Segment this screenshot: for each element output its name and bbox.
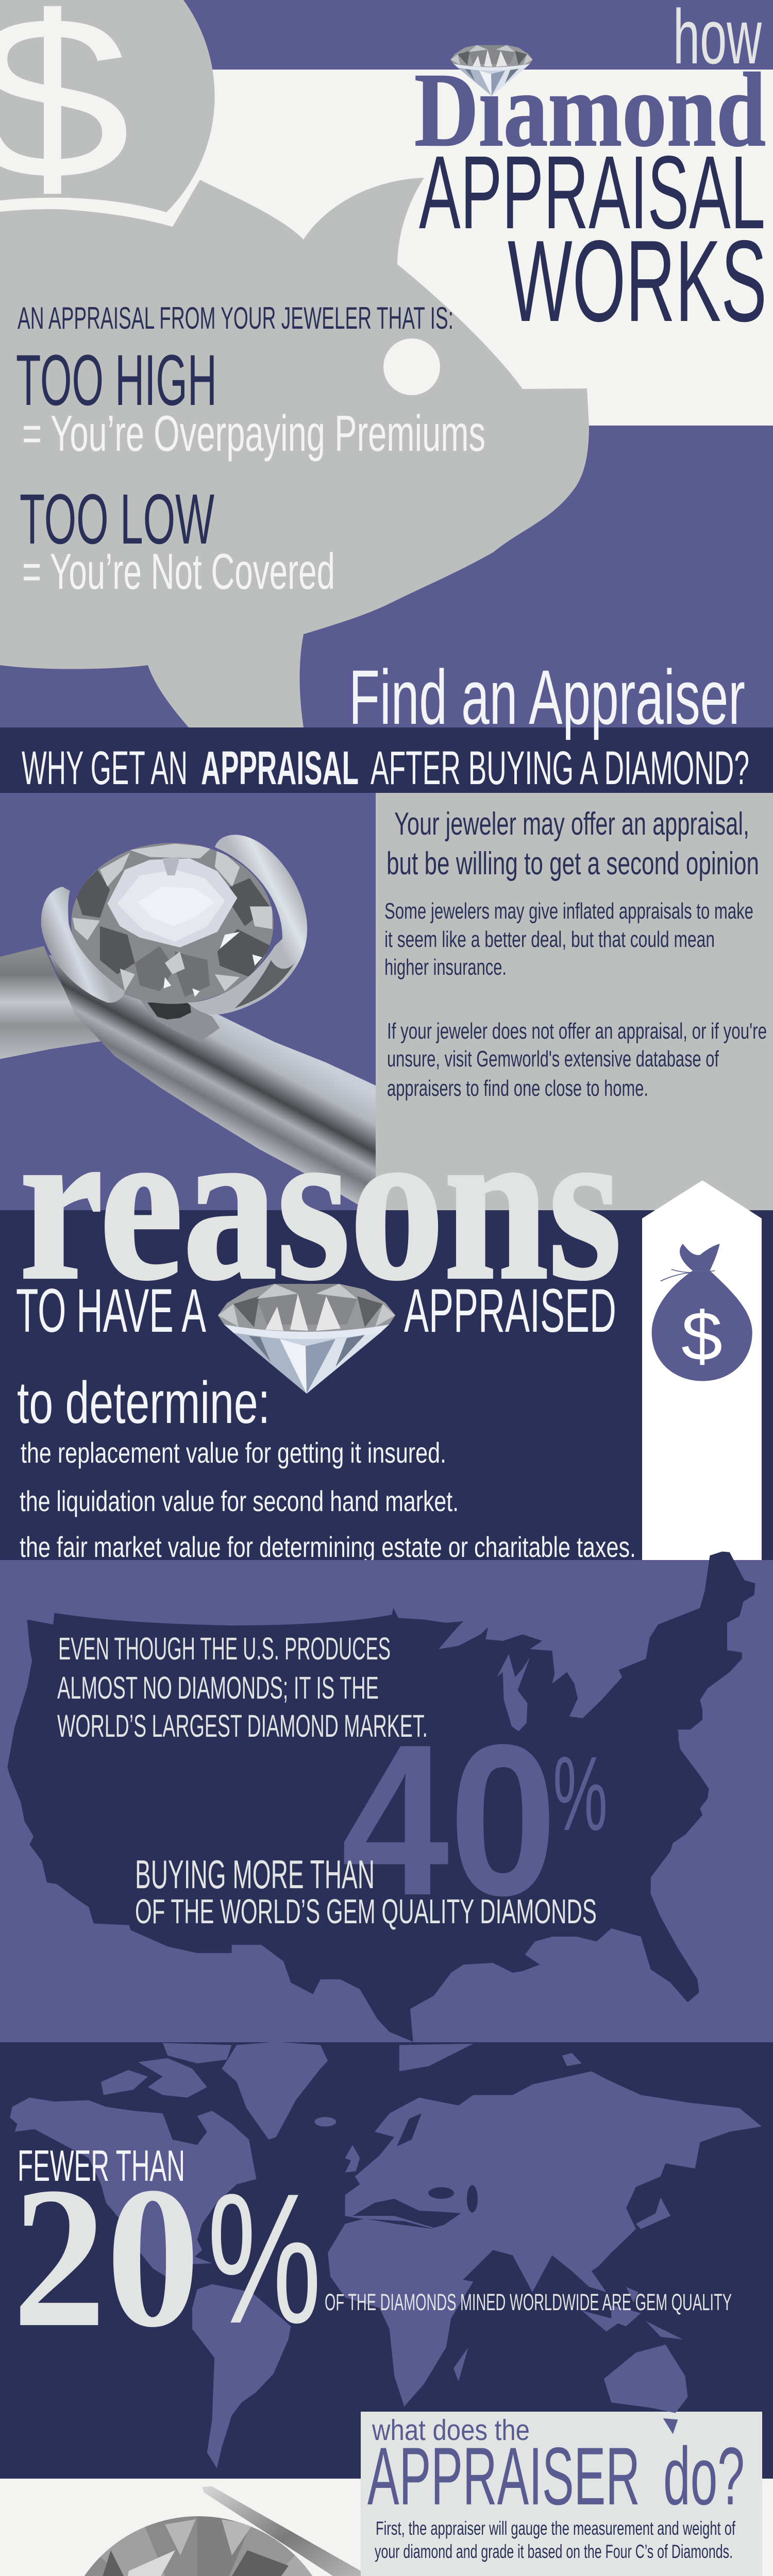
too low heading: TOO LOW (20, 480, 214, 559)
heading: what does the appraiser do: what does the (372, 2414, 530, 2447)
prong right (188, 835, 307, 1014)
stat: 40 percent: % (553, 1735, 608, 1853)
intro line: AN APPRAISAL FROM YOUR JEWELER THAT IS: (18, 301, 453, 335)
paragraph: gemworld database: appraisers to find one close to home. (387, 1076, 648, 1101)
ring panel background (0, 793, 376, 1211)
subheading (386, 806, 759, 882)
too high heading: TOO HIGH (16, 340, 217, 420)
prong shading (235, 960, 296, 1008)
right grey text panel (376, 793, 773, 1211)
top purple band (0, 0, 773, 70)
reason 2: the liquidation value for second hand market. (20, 1485, 459, 1517)
tweezers top tip (202, 2486, 361, 2576)
stat: 20 percent: 20 (12, 2145, 200, 2369)
stat: 20 percent (12, 2145, 322, 2369)
white arrow (642, 1180, 762, 1560)
subheading: to determine: to determine: (17, 1370, 270, 1436)
prong left (41, 887, 125, 1003)
paragraph: gemworld database (387, 1019, 767, 1101)
purple section behind find an appraiser (0, 426, 773, 727)
world section background (0, 2042, 773, 2479)
heading: reasons: reasons (20, 1082, 621, 1325)
heading: to have a diamond appraised: TO HAVE A (16, 1276, 206, 1345)
dark reasons section (0, 1210, 773, 1560)
ring band left (0, 946, 105, 1059)
icon: money bag (652, 1244, 752, 1381)
icon: piggy bank with coin (0, 0, 589, 727)
map: United States (7, 1551, 755, 2042)
heading: why get an appraisal: APPRAISAL (201, 742, 359, 794)
pig eye (383, 338, 440, 395)
coin (0, 0, 215, 212)
heading: why get an appraisal (22, 742, 749, 794)
icon: diamond (218, 1284, 395, 1394)
list: reasons to determine (17, 1370, 636, 1563)
image: diamond ring (0, 835, 380, 1217)
icon: small diamond above title (450, 45, 533, 96)
stat: 40 percent: 40 (341, 1700, 557, 1940)
paragraph: inflated appraisals (384, 899, 753, 980)
text block: largest diamond market (57, 1631, 428, 1743)
text: fewer than: FEWER THAN (18, 2142, 185, 2191)
heading: to have a diamond appraised (16, 1276, 616, 1345)
too high result: = You’re Overpaying Premiums (22, 405, 485, 462)
map: world (10, 2042, 762, 2468)
text block: largest diamond market: EVEN THOUGH THE U.S. PRODUCES (58, 1631, 391, 1666)
setting post (140, 999, 220, 1042)
ring band right (49, 955, 380, 1217)
dark heading band (0, 727, 773, 793)
heading: to have a diamond appraised: APPRAISED (404, 1276, 616, 1345)
icon: money bag: $ (681, 1297, 722, 1375)
image: loose diamond (85, 2486, 361, 2576)
too low result: = You’re Not Covered (22, 543, 335, 600)
title (414, 0, 767, 346)
paragraph: inflated appraisals: higher insurance. (384, 955, 507, 980)
US section background (0, 1560, 773, 2042)
text block: appraisal too high too low (16, 301, 485, 600)
panel: what does the appraiser do (361, 2412, 762, 2576)
text block: buying more than (135, 1852, 597, 1931)
text block: first the appraiser (375, 2518, 735, 2562)
bottom light section (0, 2479, 773, 2576)
text block: largest diamond market: ALMOST NO DIAMONDS; IT IS THE (57, 1670, 379, 1705)
heading: why get an appraisal: WHY GET AN (22, 742, 188, 794)
stat: 20 percent: % (207, 2155, 322, 2362)
gemstone (70, 841, 277, 1005)
text block: buying more than: BUYING MORE THAN (135, 1852, 375, 1897)
text block: largest diamond market: WORLD’S LARGEST DIAMOND MARKET. (57, 1708, 428, 1743)
reason 1: the replacement value for getting it insured. (21, 1436, 446, 1469)
text block: second opinion (384, 806, 767, 1101)
pig body (0, 178, 589, 727)
